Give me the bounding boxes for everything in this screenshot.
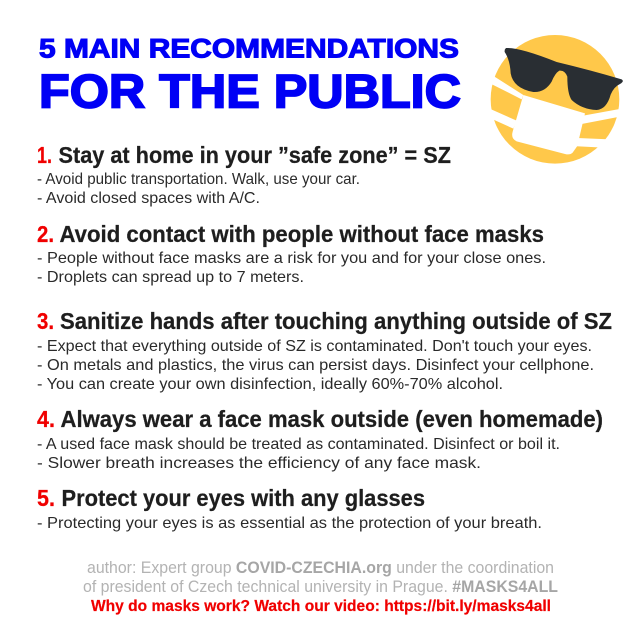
recommendation 5: 5. bbox=[37, 485, 55, 511]
recommendation 3: 3. bbox=[37, 308, 54, 334]
recommendation 3: - You can create your own disinfection, ideally 60%-70% alcohol. bbox=[37, 376, 503, 393]
footer credits bbox=[83, 559, 558, 596]
footer credits: of president of Czech technical university in Prague. #MASKS4ALL bbox=[83, 578, 558, 596]
recommendation 1: 1. bbox=[37, 142, 52, 168]
footer credits: author: Expert group COVID-CZECHIA.org under the coordination bbox=[87, 559, 554, 577]
recommendation 3: - On metals and plastics, the virus can persist days. Disinfect your cellphone. bbox=[37, 357, 594, 374]
recommendation 4 bbox=[37, 406, 603, 472]
recommendation 3: - Expect that everything outside of SZ is contaminated. Don't touch your eyes. bbox=[37, 338, 592, 355]
recommendation 4: - A used face mask should be treated as contaminated. Disinfect or boil it. bbox=[37, 436, 560, 453]
recommendation 5 bbox=[37, 485, 542, 532]
recommendation 5: Protect your eyes with any glasses bbox=[62, 485, 425, 511]
title: FOR THE PUBLIC bbox=[39, 64, 461, 117]
recommendation 2: Avoid contact with people without face masks bbox=[60, 221, 544, 247]
recommendation 3: Sanitize hands after touching anything outside of SZ bbox=[60, 308, 612, 334]
title: 5 MAIN RECOMMENDATIONS bbox=[39, 34, 459, 64]
recommendation 3 bbox=[37, 308, 612, 393]
title bbox=[39, 34, 461, 117]
recommendation 5: - Protecting your eyes is as essential as the protection of your breath. bbox=[37, 515, 542, 532]
recommendation 1: - Avoid public transportation. Walk, use your car. bbox=[37, 171, 360, 188]
icon: emoji with sunglasses and face mask bbox=[487, 35, 623, 164]
recommendation 1 bbox=[37, 142, 451, 207]
recommendation 4: 4. bbox=[37, 406, 55, 432]
recommendation 4: - Slower breath increases the efficiency of any face mask. bbox=[37, 455, 481, 472]
recommendation 1: Stay at home in your ”safe zone” = SZ bbox=[58, 142, 451, 168]
recommendation 1: - Avoid closed spaces with A/C. bbox=[37, 190, 260, 207]
recommendation 2: 2. bbox=[37, 221, 54, 247]
recommendation 4: Always wear a face mask outside (even homemade) bbox=[60, 406, 603, 432]
recommendation 2: - People without face masks are a risk for you and for your close ones. bbox=[37, 250, 546, 267]
video link: Why do masks work? Watch our video: https://bit.ly/masks4all bbox=[91, 598, 551, 615]
recommendation 2: - Droplets can spread up to 7 meters. bbox=[37, 269, 304, 286]
recommendation 2 bbox=[37, 221, 546, 286]
